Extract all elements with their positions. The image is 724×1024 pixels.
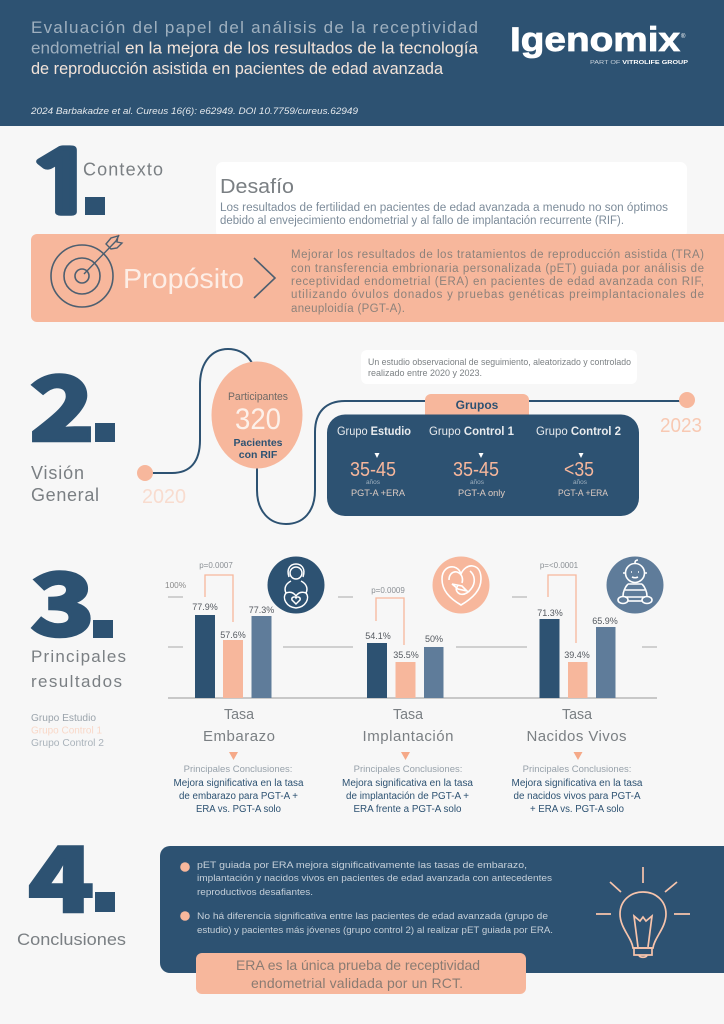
result labels: Embarazo: ERA vs. PGT-A solo [196,804,281,815]
heading: Principales resultados: resultados [31,672,122,691]
participants circle [212,362,302,468]
heading: Conclusiones: Conclusiones [17,930,126,949]
number 1: 1 [23,141,103,226]
number 2 [29,337,115,467]
bar chart: Tasa Embarazo [192,561,274,698]
panel: groups [327,414,639,516]
participants circle: Pacientes [233,437,283,449]
study description note: realizado entre 2020 y 2023. [368,368,482,379]
result labels: Nacidos Vivos: de nacidos vivos para PGT-A [514,791,641,802]
callout: ERA validated by RCT: ERA es la única prueba de receptividad [236,957,480,973]
group: Control 2 [536,426,621,499]
bar chart: Tasa Embarazo: p=0.0007 [199,561,233,570]
legend: Grupo Control 1 [31,726,102,736]
section 3: main results [30,536,664,815]
bar chart: Tasa Nacidos Vivos [537,561,618,698]
group: Control 2: <35 [564,459,594,481]
study description note: Un estudio observacional de seguimiento, aleatorizado y controlado [368,357,631,368]
timeline path [150,349,687,524]
panel: purpose [31,234,724,322]
heading: Propósito: Propósito [123,263,244,294]
result labels: Embarazo: Mejora significativa en la tasa [174,778,304,789]
timeline end: 2023 [660,392,702,437]
result labels: Implantación: Principales Conclusiones: [354,764,462,775]
bar chart: Tasa Embarazo: 77.3% [249,605,274,615]
timeline start: 2020: 2020 [142,486,186,508]
conclusion 2 [180,911,553,936]
chart axis and gridlines [165,581,657,698]
participants circle: 320 [235,403,281,436]
section 4: conclusions [17,808,724,994]
purpose text [291,249,704,315]
conclusion 2: No há diferencia significativa entre las pacientes de edad avanzada (grupo de [197,911,548,922]
result labels: Implantación: Implantación [362,728,454,745]
result labels: Implantación [342,706,473,815]
group: Control 1: años [470,479,485,486]
logo: Igenomix: Igenomix [510,21,680,59]
citation: 2024 Barbakadze et al. Cureus 16(6): e62949. DOI 10.7759/cureus.62949 [30,106,359,117]
result labels: Embarazo: Principales Conclusiones: [184,764,292,775]
number 2: 2 [29,337,95,467]
panel: conclusions [160,846,724,973]
conclusion 2: estudio) y pacientes más jóvenes (grupo control 2) al realizar pET guiada por ERA. [197,925,553,936]
result labels: Nacidos Vivos: Mejora significativa en la tasa [512,778,643,789]
icon: pregnant woman [268,556,324,614]
group: Estudio: PGT-A +ERA [351,488,406,499]
bar chart: Tasa Implantación: 35.5% [393,650,419,660]
logo: Igenomix: ® [681,33,686,40]
number 4 [28,808,115,938]
title: endometrial en la mejora de los resultados de la tecnología [31,38,479,58]
icon: fetus in heart [432,556,490,614]
purpose text: con transferencia embrionaria personalizada (pET) guiada por análisis de [291,263,704,275]
icon: chevron [254,258,275,298]
result labels: Embarazo: Tasa [224,706,255,723]
groups tab [425,394,529,422]
result labels: Implantación: de implantación de PGT-A + [346,791,469,802]
heading: Visión General: Visión [31,463,84,483]
group: Estudio [337,426,411,499]
number 3 [30,536,113,662]
bar chart: Tasa Nacidos Vivos: 65.9% [592,616,618,626]
result labels: Implantación: ERA frente a PGT-A solo [354,804,462,815]
bar chart: Tasa Nacidos Vivos: p=<0.0001 [540,561,579,570]
bar chart: Tasa Implantación: p=0.0009 [371,586,405,595]
purpose text: aneuploidía (PGT-A). [291,303,405,315]
timeline end: 2023: 2023 [660,415,702,437]
result labels: Nacidos Vivos: + ERA vs. PGT-A solo [530,804,624,815]
icon: baby [606,556,664,614]
section 1: context [23,141,724,322]
group: Estudio: 35-45 [350,459,396,481]
title: Evaluación del papel del análisis de la receptividad [31,18,478,37]
conclusion 1 [180,860,552,898]
legend: Grupo Estudio [31,713,96,724]
group: Control 1 [429,426,515,499]
bar chart: Tasa Nacidos Vivos: 39.4% [564,650,590,660]
panel: challenge [216,162,687,238]
result labels: Nacidos Vivos: Tasa [562,706,593,723]
group: Control 1: Grupo Control 1 [429,426,515,438]
bar chart: Tasa Implantación [365,586,444,698]
result labels: Embarazo [174,706,304,815]
heading: Contexto: Contexto [83,160,163,180]
group: Control 1: PGT-A only [458,488,505,499]
result labels: Nacidos Vivos: Principales Conclusiones: [523,764,631,775]
result labels: Implantación: Tasa [393,706,424,723]
conclusion 1: implantación y nacidos vivos en pacientes de edad avanzada con antecedentes [197,873,552,884]
icon: target with arrow [51,235,122,307]
group: Estudio: años [366,479,381,486]
title [31,18,479,78]
group: Control 2: años [573,479,588,486]
number 1 [23,141,105,226]
callout: ERA validated by RCT: endometrial validada por un RCT. [251,975,463,991]
heading: Visión General [31,463,99,505]
panel: challenge: Desafío [220,176,294,198]
section 2: overview [29,337,702,524]
legend: Grupo Control 2 [31,738,104,749]
timeline start: 2020 [137,465,186,508]
panel: challenge: debido al envejecimiento endometrial y al fallo de implantación recurrente (RIF). [220,215,624,227]
participants circle: Participantes [228,391,288,403]
result labels: Implantación: Mejora significativa en la tasa [342,778,473,789]
panel: challenge: Los resultados de fertilidad en pacientes de edad avanzada a menudo no son óptimos [220,202,668,214]
groups tab: Grupos [456,398,499,412]
group: Control 2: Grupo Control 2 [536,426,621,438]
bar chart: Tasa Implantación: 54.1% [365,631,391,641]
purpose text: Mejorar los resultados de los tratamientos de reproducción asistida (TRA) [291,249,704,261]
bar chart: Tasa Nacidos Vivos: 71.3% [537,608,563,618]
heading: Principales resultados: Principales [31,647,126,666]
number 3: 3 [30,536,95,662]
result labels: Nacidos Vivos: Nacidos Vivos [526,728,626,745]
purpose text: utilizando óvulos donados y pruebas genéticas preimplantacionales de [291,289,704,301]
result labels: Embarazo: de embarazo para PGT-A + [179,791,298,802]
callout: ERA validated by RCT [196,953,526,994]
purpose text: receptividad endometrial (ERA) en pacientes de edad avanzada con RIF, [291,276,704,288]
bar chart: Tasa Embarazo: 57.6% [220,630,246,640]
group: Control 2: PGT-A +ERA [558,488,609,499]
number 4: 4 [28,808,94,938]
bar chart: Tasa Embarazo: 77.9% [192,602,218,612]
legend [31,713,104,749]
result labels: Nacidos Vivos [512,706,643,815]
study description note [361,350,637,384]
result labels: Embarazo: Embarazo [203,728,275,745]
title: de reproducción asistida en pacientes de edad avanzada [31,59,444,78]
group: Estudio: Grupo Estudio [337,426,411,438]
group: Control 1: 35-45 [453,459,499,481]
conclusion 1: reproductivos desafiantes. [197,887,313,898]
bar chart: Tasa Implantación: 50% [425,634,443,644]
heading: Visión General: General [31,485,99,505]
conclusion 1: pET guiada por ERA mejora significativamente las tasas de embarazo, [197,860,527,871]
heading: Principales resultados [31,647,126,691]
chart axis and gridlines: 100% [165,581,186,590]
participants circle: con RIF [239,449,278,461]
icon: light bulb [596,867,690,957]
logo: Igenomix: PART OF VITROLIFE GROUP [590,60,688,66]
header banner [0,0,724,126]
